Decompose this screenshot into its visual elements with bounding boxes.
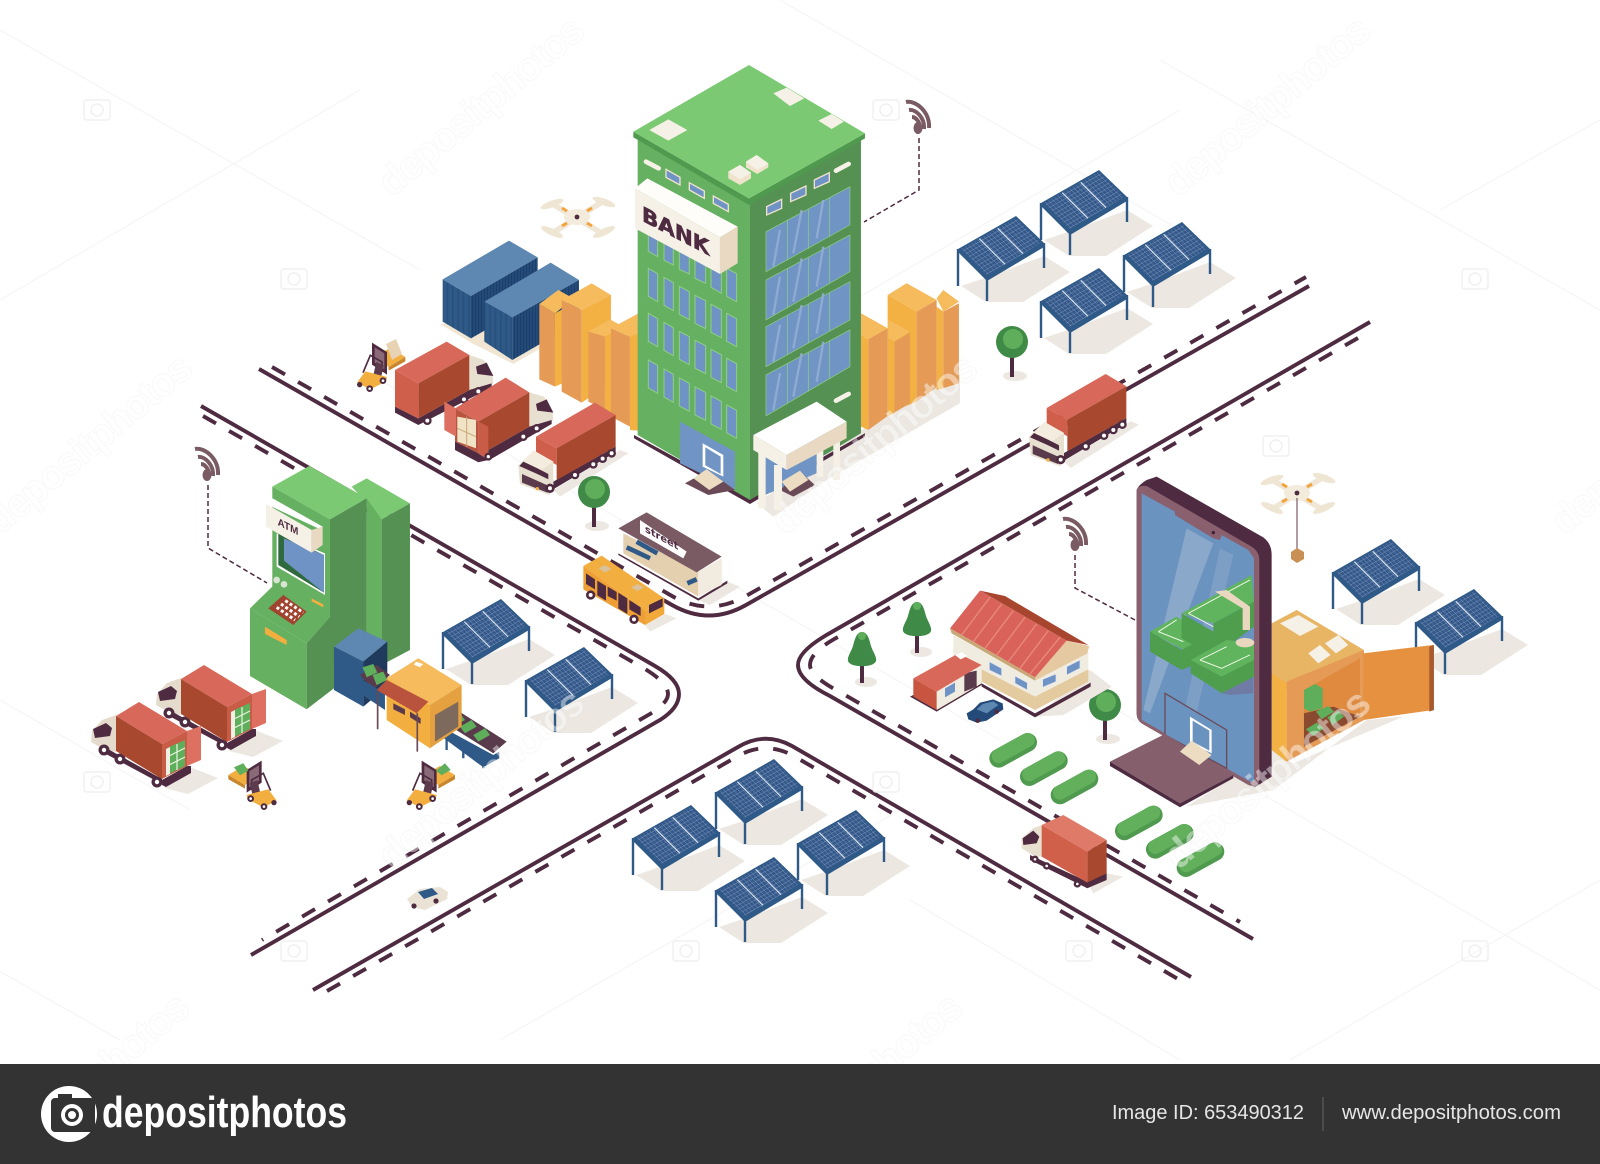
garage (910, 652, 982, 712)
truck: on upper right road (1029, 374, 1139, 468)
benches (627, 542, 697, 583)
ramp (1110, 734, 1233, 803)
blue cash box (334, 628, 387, 662)
road: bottom junction curve (313, 739, 1191, 991)
forklift: bottom left (228, 761, 277, 810)
cash stacks (1150, 575, 1254, 695)
bank sign (635, 178, 738, 274)
footer logo (41, 1086, 347, 1142)
car parked (967, 699, 1003, 723)
truck: open back, middle parked (444, 378, 553, 462)
lamps (646, 162, 849, 401)
footer bar (0, 1064, 1600, 1164)
ATM screen (277, 533, 325, 595)
footer logo: depositphotos (102, 1088, 347, 1137)
truck: bottom right (1022, 815, 1123, 893)
glass reflections (773, 200, 823, 410)
rear tower (352, 478, 410, 519)
road: left junction curve (201, 406, 679, 955)
keypad (268, 595, 307, 625)
safe box with open door (1187, 610, 1434, 807)
conical tree right (903, 602, 932, 657)
entrance canopy (753, 402, 847, 510)
watermark text: depositphotos (370, 7, 593, 205)
truck: left upper loaded (156, 665, 283, 757)
watermark text: depositphotos (1156, 680, 1379, 878)
left facade windows (648, 223, 737, 438)
tree: right of bank (996, 326, 1028, 381)
packing kiosk (387, 658, 462, 705)
watermark text: depositphotos (763, 345, 986, 543)
awning (377, 680, 428, 713)
conical tree left (848, 632, 877, 687)
solar panels: bottom group (633, 759, 910, 943)
left wall (638, 138, 750, 500)
road: upper junction curve (259, 277, 1309, 616)
ATM machine and conveyor (250, 466, 507, 768)
right wall (750, 138, 861, 500)
hedges (999, 740, 1215, 868)
ATM sign: ATM (278, 517, 298, 538)
door facade (1165, 693, 1227, 768)
rooftop units (649, 119, 687, 141)
conveyor right (435, 707, 507, 753)
solar panels: top right group (958, 170, 1236, 354)
truck: front parked (518, 403, 628, 497)
bus (583, 556, 677, 632)
building plinth (634, 433, 865, 504)
conveyor left (360, 665, 390, 690)
tree: near trucks (578, 476, 610, 531)
wifi link: ATM (195, 449, 267, 583)
round tree by house (1089, 689, 1121, 744)
solar panels: right group (1333, 539, 1528, 675)
entrance left (680, 422, 735, 495)
smartphone (1110, 477, 1272, 807)
bus stop station: street (645, 523, 678, 553)
bus stop station (618, 512, 740, 605)
truck: left lower loaded (91, 702, 218, 794)
watermark camera icons (84, 100, 1488, 961)
image id: Image ID: 653490312 (1112, 1102, 1304, 1124)
website url: www.depositphotos.com (1341, 1102, 1561, 1124)
truck: closed back, upper parked (395, 342, 493, 425)
drone with parcel (1260, 471, 1336, 563)
bank sign: BANK (642, 203, 710, 262)
house with garage (910, 591, 1112, 723)
phone body (1137, 477, 1272, 787)
wifi link: phone (1063, 519, 1135, 620)
orange towers right of bank (757, 283, 960, 517)
watermark text: depositphotos (370, 680, 593, 878)
ATM body (272, 466, 367, 519)
shipping containers (440, 241, 579, 364)
drone: top (540, 195, 616, 240)
ATM sign (266, 498, 323, 553)
car on road (407, 887, 448, 910)
roof tile ribs (962, 597, 1060, 674)
roof (633, 132, 865, 205)
forklift: top left (357, 339, 405, 392)
wifi link: bank (864, 102, 929, 222)
phone screen (1142, 493, 1254, 782)
solar panels: left group (443, 599, 638, 733)
bank building (633, 65, 865, 510)
right facade glass panels (766, 187, 850, 416)
forklift: bottom right (407, 761, 455, 810)
road: right junction curve (798, 322, 1370, 939)
orange towers left of bank (539, 283, 638, 431)
watermark text: depositphotos (1156, 7, 1379, 205)
small top windows (666, 169, 829, 215)
